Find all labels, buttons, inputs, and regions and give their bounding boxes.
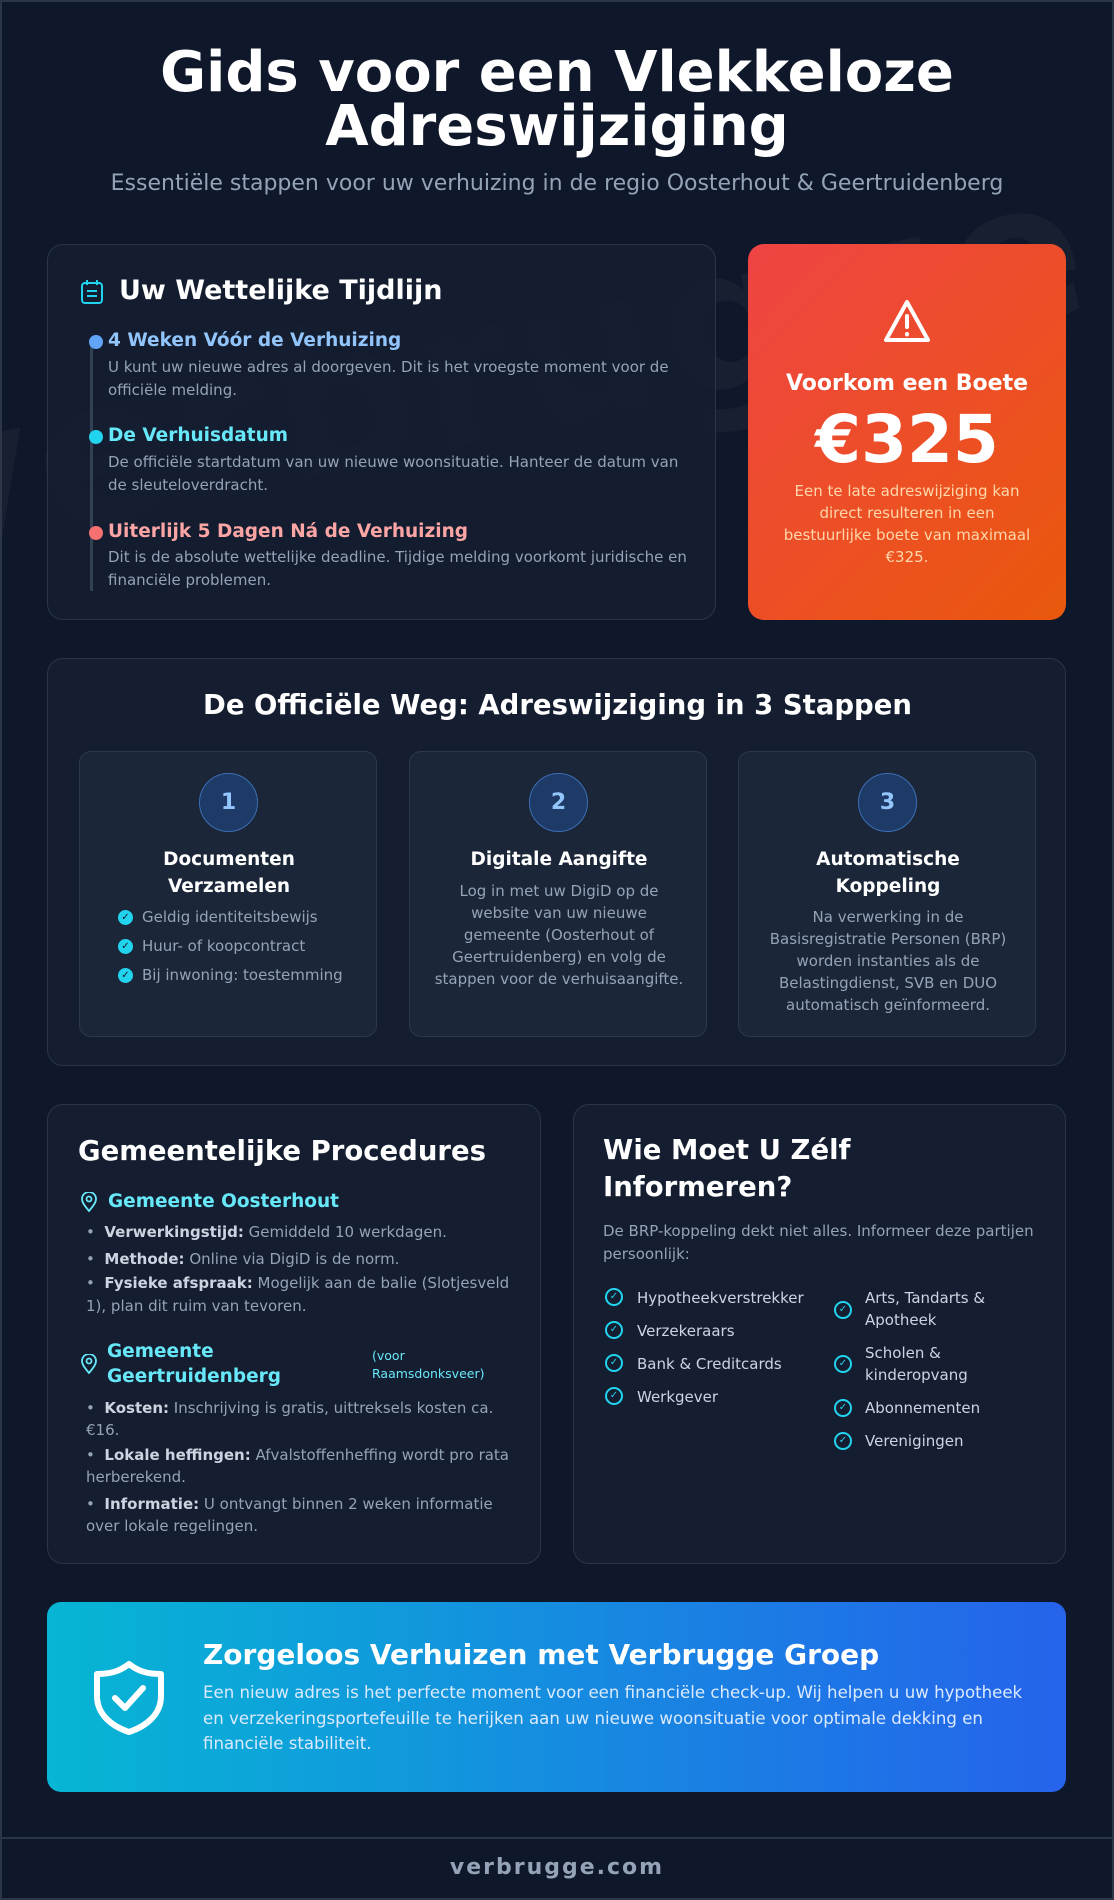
Oosterhout: Gemeente Oosterhout	[108, 1191, 339, 1212]
Oosterhout: • Fysieke afspraak: Mogelijk aan de balie (Slotjesveld 1), plan dit ruim van tevoren.	[86, 1274, 509, 1315]
heading: De Officiële Weg: Adreswijziging in 3 Stappen	[203, 689, 912, 721]
title: Adreswijziging	[325, 94, 789, 159]
panel: inform yourself	[573, 1104, 1066, 1564]
step 3	[738, 751, 1036, 1037]
checklist left: ✓	[610, 1357, 618, 1368]
title	[160, 40, 954, 159]
step 1	[79, 751, 377, 1037]
step 3: Na verwerking in de Basisregistratie Personen (BRP) worden instanties als de Belastingdienst, SVB en DUO automatisch geïnformeerd.	[770, 908, 1006, 1014]
checklist left: ✓	[610, 1390, 618, 1401]
subtitle: Essentiële stappen voor uw verhuizing in de regio Oosterhout & Geertruidenberg	[111, 171, 1003, 196]
panel: fine warning	[748, 244, 1066, 620]
checklist right: ✓	[839, 1402, 847, 1413]
amount: €325	[815, 401, 999, 478]
heading: Uw Wettelijke Tijdlijn	[119, 275, 442, 306]
checklist: ✓	[121, 941, 130, 952]
checklist: ✓	[121, 970, 130, 981]
title: Gids voor een Vlekkeloze	[160, 40, 954, 105]
checklist right: ✓	[839, 1435, 847, 1446]
checklist right: Verenigingen	[865, 1432, 964, 1450]
description: De BRP-koppeling dekt niet alles. Informeer deze partijen persoonlijk:	[603, 1222, 1034, 1263]
checklist left: ✓	[610, 1291, 618, 1302]
Oosterhout: • Methode: Online via DigiD is de norm.	[86, 1250, 399, 1268]
timeline item 2: De officiële startdatum van uw nieuwe woonsituatie. Hanteer de datum van de sleuteloverdracht.	[108, 453, 678, 494]
checklist left: Bank & Creditcards	[637, 1355, 782, 1373]
Oosterhout	[81, 1191, 509, 1315]
checklist left	[605, 1288, 804, 1406]
checklist	[118, 908, 343, 984]
icon: warning	[884, 300, 930, 342]
timeline item 2	[89, 425, 678, 494]
body: Een nieuw adres is het perfecte moment voor een financiële check-up. Wij helpen u uw hypotheek en verzekeringsportefeuille te herijken aan uw nieuwe woonsituatie voor optimale dekking en financiële stabiliteit.	[203, 1683, 1022, 1753]
checklist right: Scholen &	[865, 1344, 941, 1362]
icon: calendar	[81, 280, 103, 304]
checklist left: Werkgever	[637, 1388, 718, 1406]
checklist: ✓	[121, 912, 130, 923]
checklist: Geldig identiteitsbewijs	[142, 908, 318, 926]
timeline item 2: De Verhuisdatum	[108, 425, 288, 446]
timeline item 1	[89, 330, 669, 399]
heading: Zorgeloos Verhuizen met Verbrugge Groep	[203, 1638, 879, 1671]
checklist left: ✓	[610, 1324, 618, 1335]
Geertruidenberg: • Lokale heffingen: Afvalstoffenheffing wordt pro rata herberekend.	[86, 1446, 509, 1486]
panel: official steps	[47, 658, 1066, 1066]
callout: CTA	[47, 1602, 1066, 1792]
step 3: Koppeling	[836, 876, 940, 897]
checklist right: ✓	[839, 1358, 847, 1369]
timeline item 1: 4 Weken Vóór de Verhuizing	[108, 330, 401, 351]
step 1: Documenten	[163, 849, 295, 870]
checklist: Bij inwoning: toestemming	[142, 966, 343, 984]
step 3: Automatische	[816, 849, 960, 870]
checklist right: ✓	[839, 1304, 847, 1315]
icon: shield	[94, 1660, 164, 1735]
checklist right: Arts, Tandarts &	[865, 1289, 985, 1307]
step 2: 2	[551, 790, 566, 815]
panel: municipal procedures	[47, 1104, 541, 1564]
step 1: 1	[221, 790, 236, 815]
checklist right: Abonnementen	[865, 1399, 980, 1417]
step 1: Verzamelen	[168, 876, 290, 897]
heading: Gemeentelijke Procedures	[78, 1135, 486, 1167]
checklist right	[834, 1289, 985, 1450]
panel: timeline	[47, 244, 716, 620]
Geertruidenberg: (voor	[372, 1348, 405, 1363]
heading: Voorkom een Boete	[786, 371, 1028, 396]
Geertruidenberg: Raamsdonksveer)	[372, 1366, 484, 1381]
checklist right: Apotheek	[865, 1311, 936, 1329]
timeline item 3: Uiterlijk 5 Dagen Ná de Verhuizing	[108, 521, 468, 542]
heading	[603, 1134, 851, 1203]
heading: Wie Moet U Zélf	[603, 1134, 850, 1166]
step 3: 3	[880, 790, 895, 815]
timeline item 3	[89, 521, 687, 589]
step 2: Digitale Aangifte	[471, 849, 647, 870]
checklist right: kinderopvang	[865, 1366, 968, 1384]
Geertruidenberg: • Kosten: Inschrijving is gratis, uittreksels kosten ca. €16.	[86, 1399, 493, 1439]
timeline item 3: Dit is de absolute wettelijke deadline. Tijdige melding voorkomt juridische en financiële problemen.	[108, 548, 687, 589]
footer: verbrugge.com	[450, 1855, 664, 1880]
step 2: Log in met uw DigiD op de website van uw nieuwe gemeente (Oosterhout of Geertruidenberg) en volg de stappen voor de verhuisaangifte.	[435, 882, 683, 988]
Geertruidenberg: Gemeente	[107, 1341, 214, 1362]
heading: Informeren?	[603, 1171, 792, 1203]
Oosterhout: • Verwerkingstijd: Gemiddeld 10 werkdagen.	[86, 1223, 447, 1241]
step 2	[409, 751, 707, 1037]
timeline item 1: U kunt uw nieuwe adres al doorgeven. Dit is het vroegste moment voor de officiële melding.	[108, 358, 669, 399]
checklist: Huur- of koopcontract	[142, 937, 305, 955]
Geertruidenberg	[81, 1341, 509, 1535]
Geertruidenberg: • Informatie: U ontvangt binnen 2 weken informatie over lokale regelingen.	[86, 1495, 493, 1535]
checklist left: Hypotheekverstrekker	[637, 1289, 804, 1307]
Geertruidenberg: Geertruidenberg	[107, 1366, 281, 1387]
checklist left: Verzekeraars	[637, 1322, 735, 1340]
description: Een te late adreswijziging kan direct resulteren in een bestuurlijke boete van maximaal €325.	[784, 482, 1030, 566]
